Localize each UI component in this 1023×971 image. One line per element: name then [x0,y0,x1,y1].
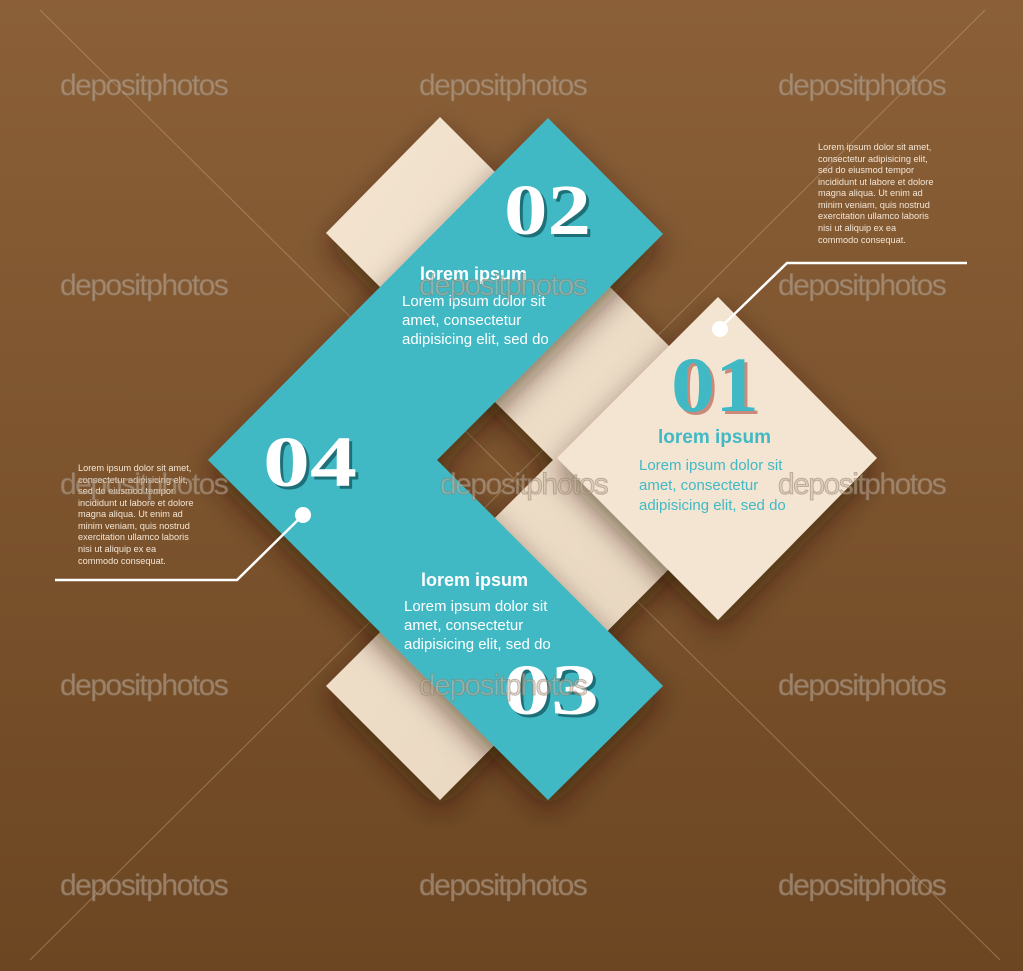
side text right: minim veniam, quis nostrud [818,200,930,210]
side text right: commodo consequat. [818,235,906,245]
side text right: sed do eiusmod tempor [818,165,914,175]
text block 02: amet, consectetur [402,312,521,329]
text block 03: adipisicing elit, sed do [404,636,551,653]
watermarks: depositphotos [419,269,587,302]
teal chevron [208,118,663,800]
watermarks: depositphotos [60,468,228,501]
text block 03: Lorem ipsum dolor sit [404,598,548,615]
number 02: 02 [504,170,591,250]
side text left: consectetur adipisicing elit, [78,475,188,485]
watermarks: depositphotos [778,468,946,501]
watermarks: depositphotos [778,869,946,902]
number 04: 04 [263,422,357,502]
side text right: incididunt ut labore et dolore [818,177,933,187]
number 01: 01 [671,341,759,428]
connector line left [55,507,311,580]
text block 02: lorem ipsum [420,264,527,284]
text block 03 [404,570,551,653]
text block 01: amet, consectetur [639,477,758,494]
text block 01: Lorem ipsum dolor sit [639,457,783,474]
side text left: exercitation ullamco laboris [78,532,189,542]
side text right [818,142,933,245]
text block 01: adipisicing elit, sed do [639,497,786,514]
watermarks: depositphotos [419,69,587,102]
side text right: magna aliqua. Ut enim ad [818,188,923,198]
number 02: 02 [507,173,594,253]
text block 01 [639,427,786,514]
watermarks: depositphotos [419,869,587,902]
side text left: commodo consequat. [78,556,166,566]
text block 02: Lorem ipsum dolor sit [402,293,546,310]
number 03: 03 [506,653,602,733]
watermarks: depositphotos [60,669,228,702]
watermarks: depositphotos [778,669,946,702]
number 03: 03 [503,650,599,730]
number 04: 04 [266,425,360,505]
side text left: Lorem ipsum dolor sit amet, [78,463,191,473]
watermarks: depositphotos [778,69,946,102]
number 01: 01 [674,344,762,431]
watermarks: depositphotos [60,69,228,102]
side text right: nisi ut aliquip ex ea [818,223,897,233]
side text left: nisi ut aliquip ex ea [78,544,157,554]
diamond 01 [557,297,877,620]
watermarks: depositphotos [440,468,608,501]
text block 03: lorem ipsum [421,570,528,590]
side text right: Lorem ipsum dolor sit amet, [818,142,931,152]
text block 03: amet, consectetur [404,617,523,634]
side text left: incididunt ut labore et dolore [78,498,193,508]
watermarks: depositphotos [419,669,587,702]
watermarks: depositphotos [60,869,228,902]
side text left: minim veniam, quis nostrud [78,521,190,531]
side text right: exercitation ullamco laboris [818,211,929,221]
watermarks: depositphotos [60,269,228,302]
watermarks: depositphotos [778,269,946,302]
side text right: consectetur adipisicing elit, [818,154,928,164]
connector line right [712,263,967,337]
text block 02: adipisicing elit, sed do [402,331,549,348]
side text left: sed do eiusmod tempor [78,486,174,496]
text block 01: lorem ipsum [658,427,771,448]
side text left [78,463,193,566]
text block 02 [402,264,549,348]
side text left: magna aliqua. Ut enim ad [78,509,183,519]
watermarks [60,69,946,902]
beige chevron [326,117,780,800]
